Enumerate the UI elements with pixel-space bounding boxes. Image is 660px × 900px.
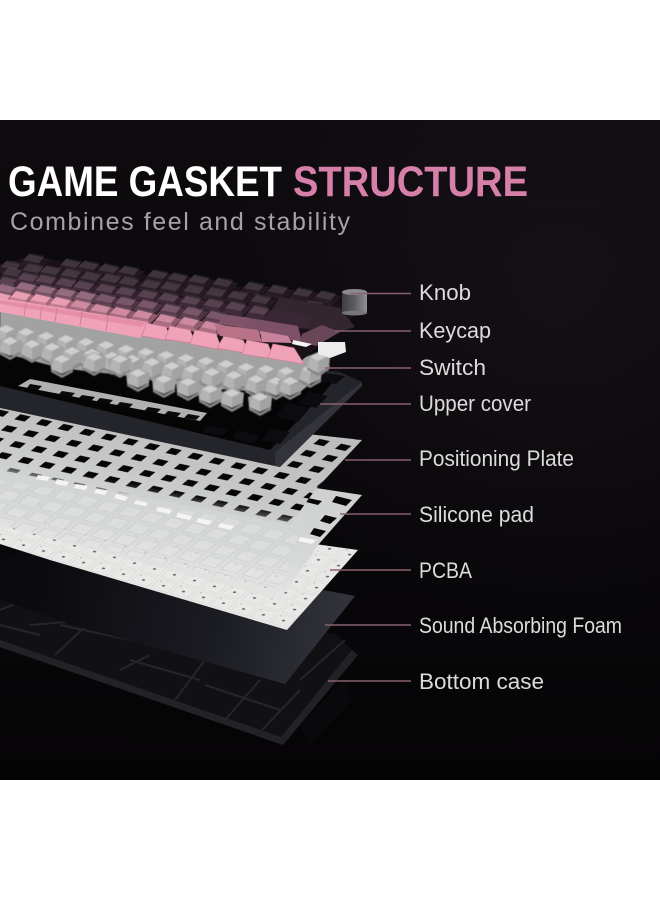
switches	[0, 310, 330, 416]
PCBA	[0, 500, 358, 630]
knob	[342, 289, 367, 316]
positioning plate	[0, 400, 362, 544]
labels	[419, 280, 622, 694]
callout leader lines	[320, 294, 411, 681]
subtitle: Combines feel and stability	[10, 208, 350, 236]
bottom case	[0, 594, 358, 745]
infographic: keyboard exploded view	[0, 120, 660, 780]
labels: Knob	[419, 280, 471, 305]
labels: Upper cover	[419, 391, 531, 416]
silicone pad	[0, 440, 362, 600]
panel glow	[0, 120, 660, 780]
labels: Silicone pad	[419, 502, 534, 527]
keycaps	[0, 253, 355, 364]
labels: Switch	[419, 355, 486, 380]
upper cover	[0, 340, 362, 467]
labels: Sound Absorbing Foam	[419, 613, 622, 638]
dark panel background	[0, 120, 660, 780]
sound absorbing foam	[0, 540, 355, 684]
labels: Positioning Plate	[419, 446, 574, 471]
labels: Keycap	[419, 318, 491, 343]
labels: PCBA	[419, 558, 472, 583]
title: GAME GASKET	[8, 158, 282, 206]
title: STRUCTURE	[293, 158, 528, 206]
labels: Bottom case	[419, 669, 544, 694]
title	[8, 158, 528, 206]
